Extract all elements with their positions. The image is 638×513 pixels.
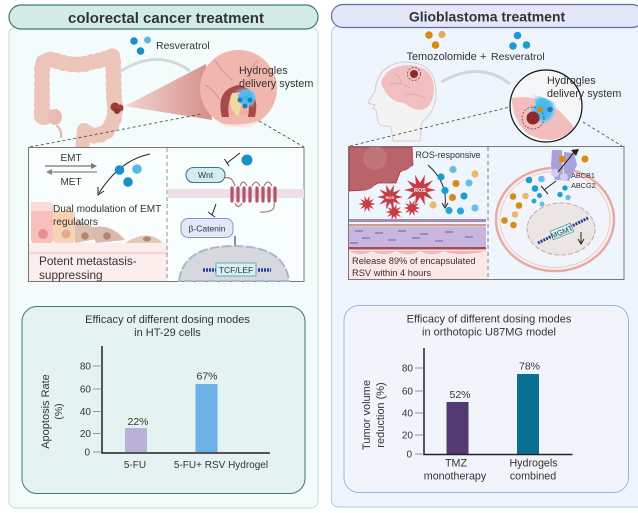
icon: ROS bursts: ROS [386,195,395,200]
inhibition: to nucleus [231,236,239,256]
arrow: brain to zoom [441,71,510,84]
block: potent metastasis-suppressing [29,243,168,282]
label: ABCB1 ABCG2: ABCB1 [571,171,595,180]
icon: Wnt [186,168,225,182]
icon: Wnt: Wnt [198,170,214,180]
label: hydrogels delivery system: delivery system [547,88,621,100]
bar chart: 78% [519,360,540,372]
bar chart: Hydrogels [509,458,558,470]
icon: vessel wall [349,219,486,250]
label: TCF/LEF: TCF/LEF [219,265,253,275]
chart title: Efficacy of different dosing modes [85,314,250,326]
chart title: in orthotopic U87MG model [422,326,556,338]
icon: resveratrol molecules [509,32,530,50]
inhibition: resveratrol on Wnt [224,153,252,166]
arrowhead: EMT [91,163,97,169]
bar chart: 60 [402,386,413,398]
panel: mechanism [28,148,304,282]
icon: membrane [168,178,304,212]
label: ABCB1 ABCG2: ABCG2 [571,181,596,190]
icon: head with brain [368,62,436,141]
bar chart: 5-FU+ RSV Hydrogel [174,460,268,471]
bar chart: 20 [402,430,413,442]
icon: ROS bursts [358,175,436,220]
icon: colon [34,56,124,150]
y axis unit: (%) [53,403,65,420]
icon: resveratrol molecules [130,36,151,55]
panel: HT-29 chart [22,306,305,494]
icon: nucleus with MGMT [527,203,595,255]
panel: mechanism [348,146,624,280]
label: dual modulation: Dual modulation of EMT [53,204,161,215]
arrow: EMT [45,165,94,167]
zoom guide lines [30,114,304,147]
bar chart: monotherapy [424,470,487,482]
label: hydrogels delivery system: Hydrogles [547,75,596,87]
bar chart: TMZ [445,458,467,470]
icon: epithelial cells [31,202,163,243]
block: release note: Release 89% of encapsulated [352,256,476,266]
label: EMT: EMT [60,153,82,164]
zoom wedge [125,64,212,120]
bar chart: 80 [80,362,91,372]
block: release note: RSV within 4 hours [352,268,431,278]
bar chart: 60 [80,384,91,396]
inhibition: on transporter [541,181,556,194]
bar chart: 0 [84,448,90,458]
bar chart: 22% [127,416,149,428]
label: TCF/LEF [216,263,256,276]
bar chart [402,348,572,482]
bar chart: 40 [80,407,91,418]
icon: beta-catenin: β-Catenin [188,224,226,234]
icon: nucleus with MGMT: MGMT [550,223,575,240]
divider [487,147,489,279]
label: temozolomide + resveratrol: Resveratrol [491,51,545,63]
bar chart: combined [510,470,556,482]
divider [166,148,168,281]
bar chart: 52% [449,389,471,401]
icon: beta-catenin [181,218,233,238]
heading: colorectal cancer treatment [9,5,318,29]
y axis label: Tumor volume [361,380,373,450]
bar chart: 40 [402,408,413,420]
icon: tumor mass [349,146,413,191]
panel: glioblastoma treatment [332,4,638,507]
icon: nucleus [179,246,289,281]
icon: ROS bursts: ROS [414,188,426,194]
arrow: ROS release [428,165,448,208]
y axis label: Apoptosis Rate [40,374,52,449]
chart title: in HT-29 cells [134,327,201,339]
bar chart: 0 [406,450,412,460]
inhibition: to beta-catenin [208,204,216,217]
block: release note [349,250,487,279]
bar chart: 5-FU [124,460,146,471]
label: hydrogels delivery system: delivery system [239,78,313,90]
arrow: colon to zoom [121,60,190,71]
bar chart: 67% [196,370,218,382]
panel: U87MG chart [344,306,628,492]
y axis label line 2: reduction (%) [375,382,387,448]
label: temozolomide + resveratrol: Temozolomide [406,51,477,63]
heading: colorectal cancer treatment: colorectal cancer treatment [68,10,264,27]
bar chart [80,346,270,471]
icon: intracellular drugs [501,176,571,228]
icon: drug particles [429,166,479,215]
zoom guide lines [350,107,622,146]
bar chart: 20 [80,429,91,440]
icon: brain zoom [510,70,582,142]
chart title: Efficacy of different dosing modes [407,314,572,326]
icon: resveratrol [115,164,142,187]
label: resveratrol: Resveratrol [156,40,210,52]
label: MET: MET [60,177,82,188]
icon: tumor cell [496,168,614,271]
label: hydrogels delivery system: Hydrogles [239,65,288,77]
heading: glioblastoma treatment: Glioblastoma treatment [409,8,566,24]
arrow: resveratrol entering [98,154,150,195]
label: dual modulation: regulators [53,217,98,228]
label: temozolomide + resveratrol: + [480,51,486,63]
icon: efflux transporter [551,149,588,181]
panel: colorectal cancer treatment [9,5,318,508]
block: potent metastasis-suppressing: suppressing [39,268,103,282]
arrow: MET [48,171,97,173]
label: ROS-responsive: ROS-responsive [416,150,481,160]
bar chart: 80 [402,364,413,374]
heading: glioblastoma treatment [332,4,638,28]
arrowhead: MET [46,169,52,175]
icon: temozolomide molecules [425,31,446,49]
block: potent metastasis-suppressing: Potent metastasis- [39,254,137,268]
icon: colon lumen zoom [200,50,277,127]
